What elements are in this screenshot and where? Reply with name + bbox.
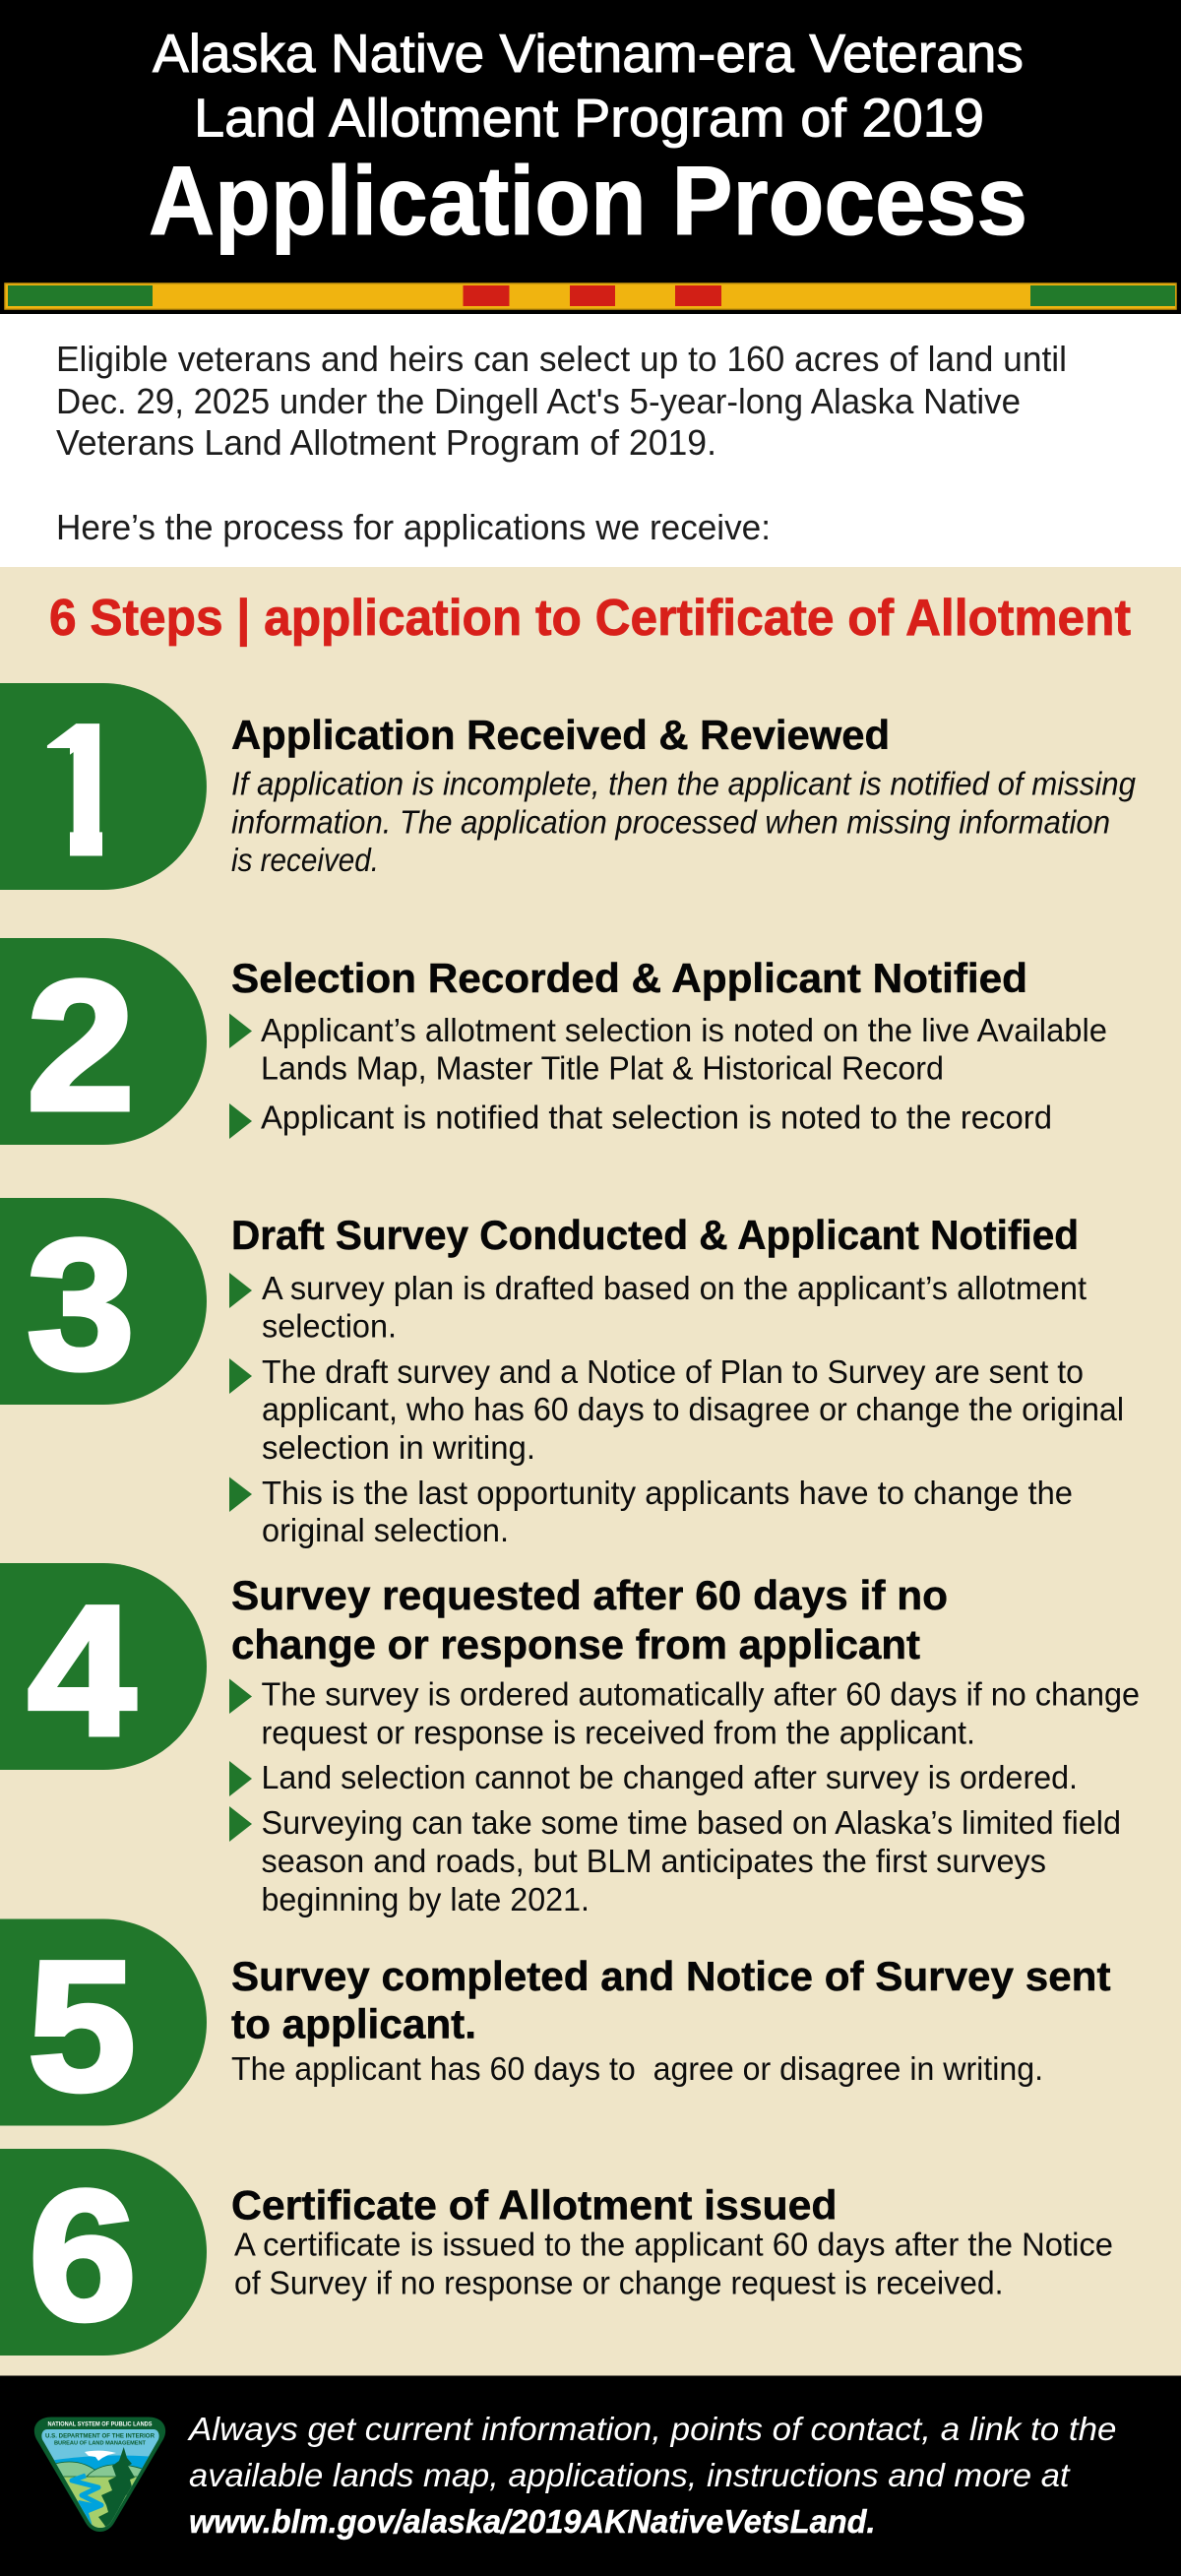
number badge 2: 2: [27, 942, 135, 1149]
step 4 bullet 3: beginning by late 2021.: [262, 1882, 590, 1918]
step 3 bullet 2: selection in writing.: [262, 1430, 535, 1467]
step 4 heading: change or response from applicant: [231, 1621, 920, 1667]
footer text: www.blm.gov/alaska/2019AKNativeVetsLand.: [189, 2504, 876, 2541]
number badge 2: [0, 938, 207, 1149]
step 6 description: [234, 2227, 1113, 2301]
title: Application Process: [149, 146, 1027, 255]
panel: header: [0, 0, 1181, 314]
step 3 bullet 1: A survey plan is drafted based on the applicant’s allotment: [262, 1271, 1088, 1307]
step 3 bullet 2: The draft survey and a Notice of Plan to Survey are sent to: [262, 1354, 1084, 1391]
number badge 3: [0, 1198, 207, 1408]
step 5: [0, 1919, 1111, 2129]
step 6: [0, 2149, 1113, 2358]
step 1 description: is received.: [231, 843, 379, 879]
title: [149, 23, 1027, 255]
step 4: [0, 1563, 1140, 1918]
step 4 heading: Survey requested after 60 days if no: [231, 1572, 948, 1618]
number badge 4: [0, 1563, 207, 1774]
title: Alaska Native Vietnam-era Veterans: [153, 23, 1024, 84]
intro text: Veterans Land Allotment Program of 2019.: [56, 422, 716, 463]
step 3 bullet 3: [229, 1476, 1073, 1549]
number badge 1: [0, 683, 207, 893]
step 4 heading: [231, 1572, 948, 1667]
number badge 6: [0, 2149, 207, 2358]
step 4 bullet 1: The survey is ordered automatically after 60 days if no change: [262, 1677, 1140, 1713]
number badge 1: 1: [38, 686, 127, 893]
step 2 bullet 1: Lands Map, Master Title Plat & Historical Record: [261, 1051, 944, 1087]
service ribbon: [5, 283, 1176, 309]
title: Land Allotment Program of 2019: [194, 87, 984, 148]
step 3 bullet 2: applicant, who has 60 days to disagree or change the original: [262, 1392, 1124, 1428]
step 3 bullet 3: original selection.: [262, 1513, 509, 1549]
step 2 bullet 1: Applicant’s allotment selection is noted on the live Available: [261, 1013, 1107, 1049]
intro text: [56, 339, 1067, 547]
footer text: [187, 2412, 1117, 2541]
step 4 bullet 1: [229, 1677, 1140, 1752]
intro text: Dec. 29, 2025 under the Dingell Act's 5-year-long Alaska Native: [56, 381, 1021, 421]
step 4 bullet 2: Land selection cannot be changed after survey is ordered.: [262, 1760, 1078, 1796]
step 2 bullet 2: Applicant is notified that selection is noted to the record: [261, 1100, 1052, 1136]
step 3 bullet 1: [229, 1271, 1088, 1345]
step 5 heading: to applicant.: [231, 2000, 476, 2047]
step 6 description: of Survey if no response or change request is received.: [234, 2266, 1004, 2301]
step 2 bullet 1: [229, 1013, 1107, 1087]
step 4 bullet 3: Surveying can take some time based on Alaska’s limited field: [262, 1805, 1121, 1842]
step 5 heading: [231, 1953, 1111, 2047]
step 3 bullet 3: This is the last opportunity applicants have to change the: [262, 1476, 1073, 1512]
number badge 5: [0, 1919, 207, 2129]
footer text: Always get current information, points of contact, a link to the: [187, 2412, 1117, 2448]
section heading: 6 Steps | application to Certificate of Allotment: [49, 590, 1131, 647]
step 3 heading: Draft Survey Conducted & Applicant Notified: [231, 1212, 1079, 1258]
step 3: [0, 1198, 1124, 1549]
number badge 6: 6: [29, 2152, 137, 2358]
number badge 5: 5: [28, 1922, 136, 2129]
step 3 bullet 2: [229, 1354, 1124, 1467]
step 1 description: If application is incomplete, then the applicant is notified of missing: [231, 766, 1136, 803]
step 6 heading: Certificate of Allotment issued: [231, 2181, 837, 2229]
intro text: Eligible veterans and heirs can select up to 160 acres of land until: [56, 339, 1067, 379]
step 4 bullet 3: [229, 1805, 1121, 1918]
number badge 4: 4: [28, 1567, 136, 1774]
step 2 heading: Selection Recorded & Applicant Notified: [231, 955, 1027, 1001]
step 1 description: [231, 766, 1136, 879]
step 1: [0, 683, 1136, 893]
step 1 description: information. The application processed when missing information: [231, 805, 1110, 841]
icon: BLM logo: [34, 2418, 167, 2535]
panel: introduction: [0, 314, 1181, 567]
icon: BLM logo: BUREAU OF LAND MANAGEMENT: [54, 2441, 147, 2447]
panel: footer: [0, 2376, 1181, 2576]
step 5 heading: Survey completed and Notice of Survey sent: [231, 1953, 1111, 1999]
icon: BLM logo: U.S. DEPARTMENT OF THE INTERIOR: [45, 2433, 155, 2439]
step 6 description: A certificate is issued to the applicant 60 days after the Notice: [234, 2227, 1113, 2264]
step 1 heading: Application Received & Reviewed: [231, 712, 890, 758]
step 3 bullet 1: selection.: [262, 1309, 397, 1345]
step 5 description: The applicant has 60 days to agree or disagree in writing.: [231, 2051, 1043, 2088]
footer text: available lands map, applications, instructions and more at: [189, 2458, 1071, 2494]
step 4 bullet 3: season and roads, but BLM anticipates the first surveys: [262, 1844, 1046, 1880]
intro text: Here’s the process for applications we receive:: [56, 507, 771, 547]
icon: BLM logo: NATIONAL SYSTEM OF PUBLIC LANDS: [47, 2421, 152, 2427]
step 2: [0, 938, 1107, 1149]
number badge 3: 3: [27, 1201, 135, 1408]
step 4 bullet 1: request or response is received from the applicant.: [262, 1715, 975, 1752]
